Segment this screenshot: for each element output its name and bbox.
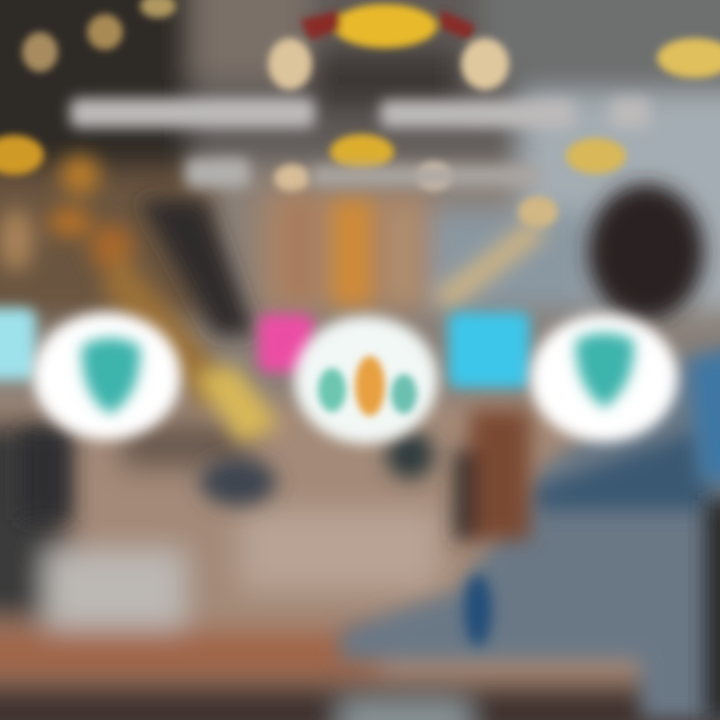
panel: colored label tabs xyxy=(0,308,530,388)
right person: head and shirt xyxy=(340,184,720,720)
icon circle: right shield xyxy=(530,314,678,442)
warm glowing light streaks xyxy=(0,155,548,445)
heading: blurred title bars xyxy=(70,98,650,188)
hanging ceiling lamps xyxy=(0,0,720,228)
dark figures behind table xyxy=(20,410,530,540)
icon circle: center bar chart xyxy=(294,316,438,444)
icon circle: left shield xyxy=(33,312,181,440)
dark ceiling beam xyxy=(140,200,255,335)
